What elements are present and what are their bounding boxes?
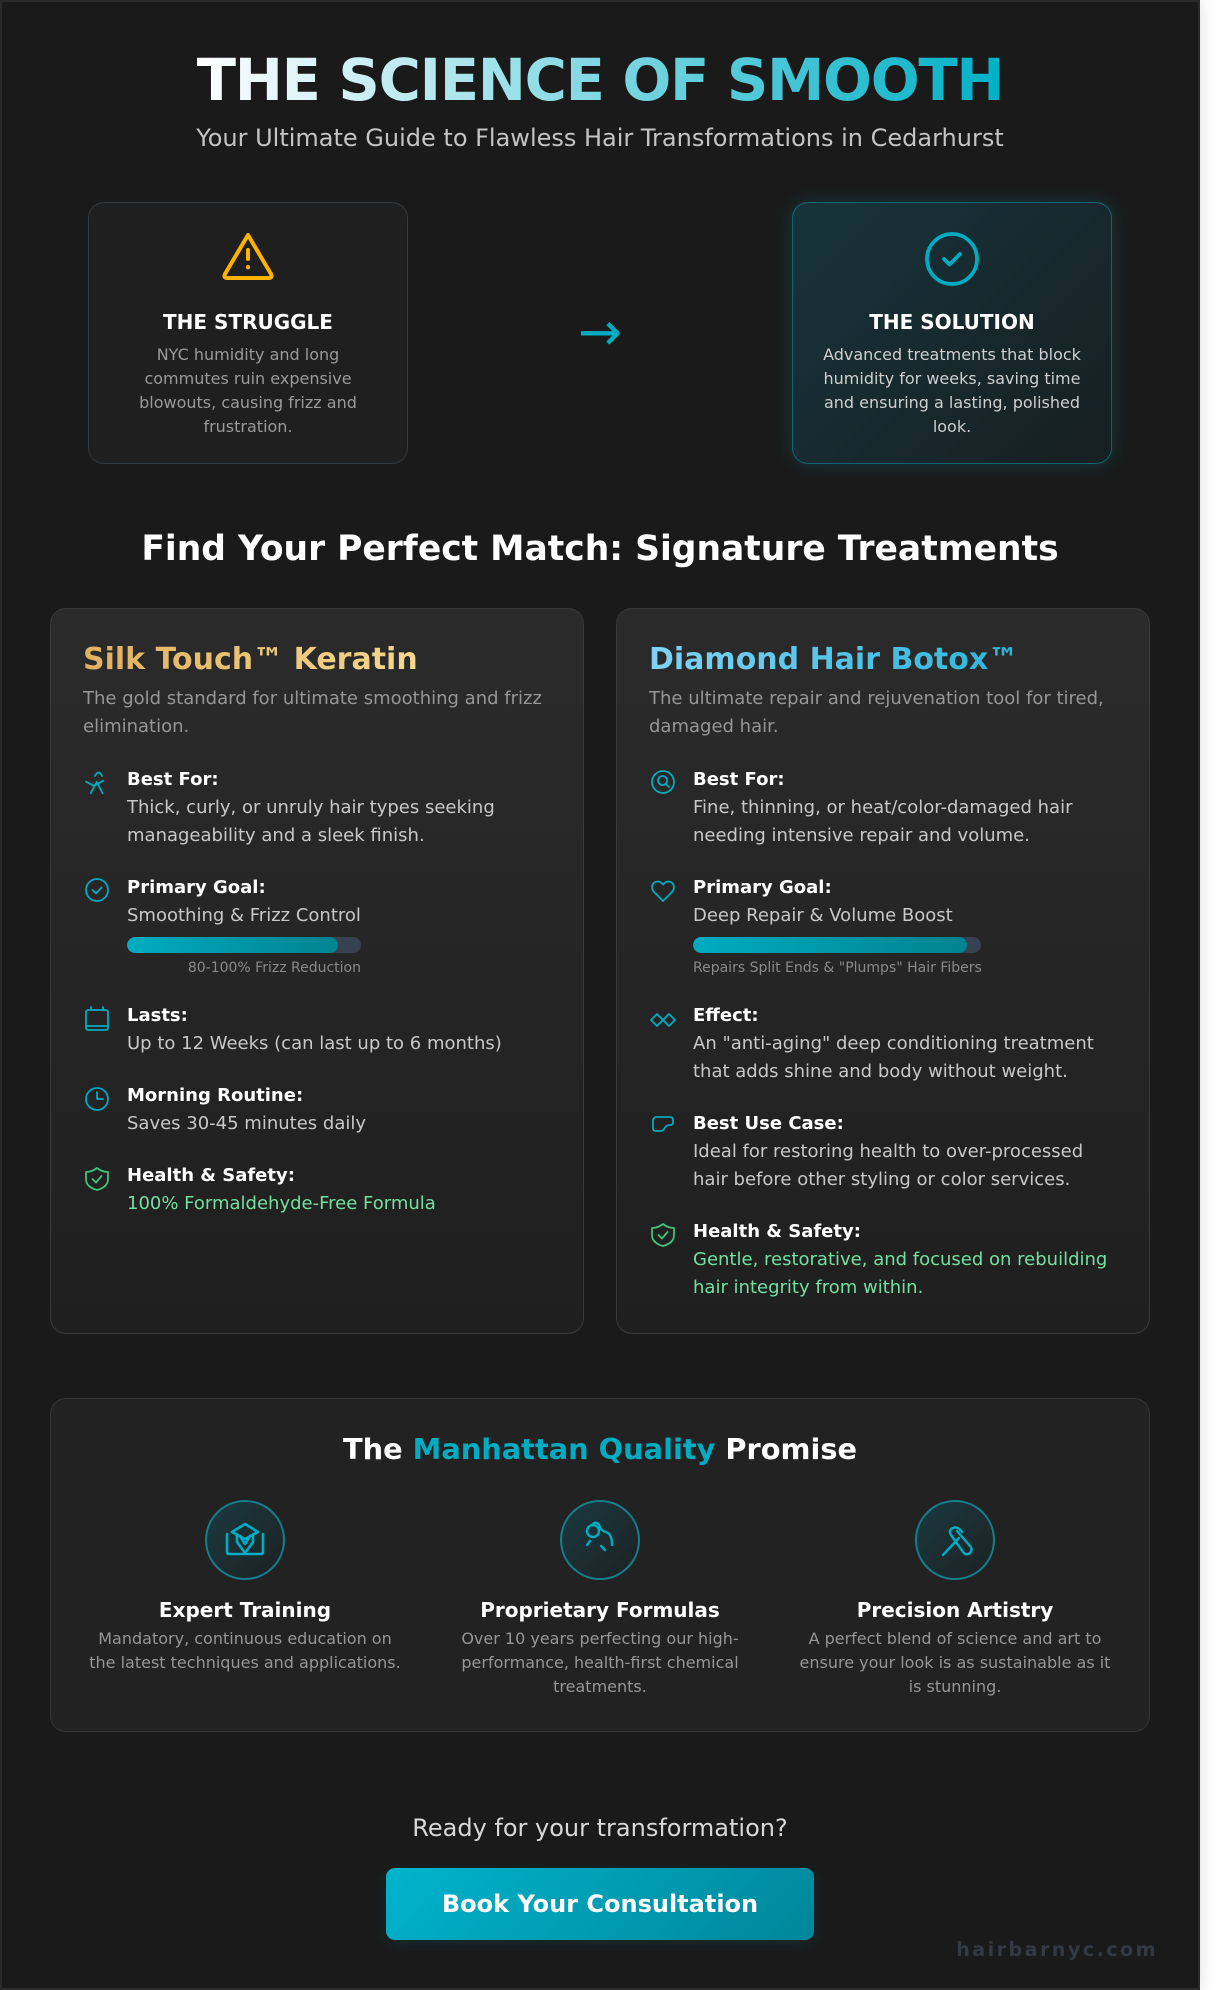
- card description: The ultimate repair and rejuvenation tool for tired,: [649, 688, 1104, 709]
- primary goal: [127, 877, 361, 926]
- best use case: [693, 1113, 1083, 1190]
- morning routine: [127, 1085, 366, 1134]
- panel: Silk Touch Keratin: [50, 608, 584, 1334]
- lasts: [127, 1005, 502, 1054]
- call to action button: [386, 1868, 814, 1940]
- best for: manageability and a sleek finish.: [127, 825, 425, 846]
- effect: [693, 1005, 1094, 1082]
- icon: formula: [560, 1500, 640, 1580]
- health and safety: Health & Safety:: [127, 1165, 295, 1186]
- health and safety: [693, 1221, 1107, 1298]
- subtitle: Your Ultimate Guide to Flawless Hair Transformations in Cedarhurst: [196, 124, 1004, 152]
- progress label: Repairs Split Ends & "Plumps" Hair Fibers: [693, 960, 982, 976]
- solution text: and ensuring a lasting, polished: [824, 393, 1080, 412]
- solution text: humidity for weeks, saving time: [824, 369, 1080, 388]
- struggle text: blowouts, causing frizz and: [139, 393, 357, 412]
- formulas text: [461, 1629, 739, 1696]
- call to action text: Ready for your transformation?: [412, 1814, 788, 1842]
- icon: heart: [651, 880, 675, 902]
- health and safety: 100% Formaldehyde-Free Formula: [127, 1193, 436, 1214]
- icon: goal check: [85, 878, 109, 902]
- morning routine: Saves 30-45 minutes daily: [127, 1113, 366, 1134]
- primary goal: Primary Goal:: [127, 877, 266, 898]
- title: THE SCIENCE OF SMOOTH: [197, 47, 1003, 114]
- formulas text: performance, health-first chemical: [461, 1653, 739, 1672]
- formulas text: treatments.: [553, 1677, 647, 1696]
- struggle text: NYC humidity and long: [157, 345, 339, 364]
- card description: elimination.: [83, 716, 189, 737]
- primary goal: [693, 877, 953, 926]
- struggle text: [139, 345, 357, 436]
- artistry text: is stunning.: [909, 1677, 1001, 1696]
- best use case: Ideal for restoring health to over-processed: [693, 1141, 1083, 1162]
- expert training: [89, 1598, 401, 1672]
- promise heading: The Manhattan Quality Promise: [343, 1432, 857, 1466]
- solution text: Advanced treatments that block: [823, 345, 1081, 364]
- card description: damaged hair.: [649, 716, 779, 737]
- progress label: 80-100% Frizz Reduction: [188, 960, 361, 976]
- health and safety: [127, 1165, 436, 1214]
- panel: Diamond Hair Botox: [616, 608, 1150, 1334]
- struggle text: commutes ruin expensive: [144, 369, 352, 388]
- training text: the latest techniques and applications.: [89, 1653, 401, 1672]
- precision artistry: [800, 1598, 1110, 1696]
- training text: Mandatory, continuous education on: [98, 1629, 392, 1648]
- artistry text: [800, 1629, 1110, 1696]
- effect: Effect:: [693, 1005, 759, 1026]
- icon: search circle: [651, 770, 675, 794]
- primary goal: Deep Repair & Volume Boost: [693, 905, 953, 926]
- icon: precision tool: [915, 1500, 995, 1580]
- panel: the struggle: [88, 202, 408, 464]
- card description: [82, 688, 542, 737]
- artistry title: Precision Artistry: [857, 1598, 1053, 1622]
- best for: Best For:: [127, 769, 219, 790]
- lasts: Lasts:: [127, 1005, 188, 1026]
- panel: the solution: [792, 202, 1112, 464]
- effect: An "anti-aging" deep conditioning treatment: [693, 1033, 1094, 1054]
- watermark: hairbarnyc.com: [956, 1938, 1158, 1961]
- training title: Expert Training: [159, 1598, 331, 1622]
- solution text: [823, 345, 1081, 436]
- struggle text: frustration.: [203, 417, 293, 436]
- icon: clock: [85, 1087, 109, 1111]
- artistry text: ensure your look is as sustainable as it: [800, 1653, 1110, 1672]
- panel: Manhattan Quality Promise: [50, 1398, 1150, 1732]
- card description: [648, 688, 1104, 737]
- card title: Diamond Hair Botox™: [649, 642, 1018, 677]
- progress bar: [693, 937, 981, 953]
- section heading: Find Your Perfect Match: Signature Treatments: [141, 529, 1059, 569]
- icon: graduation cap: [205, 1500, 285, 1580]
- proprietary formulas: [461, 1598, 739, 1696]
- arrow: →: [578, 302, 622, 363]
- best for: needing intensive repair and volume.: [693, 825, 1030, 846]
- training text: [89, 1629, 401, 1672]
- health and safety: Health & Safety:: [693, 1221, 861, 1242]
- best for: [693, 769, 1072, 846]
- icon: shield: [651, 1223, 675, 1247]
- primary goal: Primary Goal:: [693, 877, 832, 898]
- health and safety: Gentle, restorative, and focused on rebuilding: [693, 1249, 1107, 1270]
- icon: warning triangle: [222, 232, 274, 280]
- best for: Thick, curly, or unruly hair types seeking: [127, 797, 495, 818]
- card description: The gold standard for ultimate smoothing and frizz: [83, 688, 542, 709]
- formulas title: Proprietary Formulas: [480, 1598, 720, 1622]
- artistry text: A perfect blend of science and art to: [809, 1629, 1101, 1648]
- icon: shield: [85, 1167, 109, 1191]
- health and safety: hair integrity from within.: [693, 1277, 923, 1298]
- icon: calendar: [85, 1006, 109, 1031]
- call to action button: Book Your Consultation: [442, 1890, 758, 1918]
- icon: best for: [85, 772, 104, 794]
- lasts: Up to 12 Weeks (can last up to 6 months): [127, 1033, 502, 1054]
- struggle heading: THE STRUGGLE: [163, 310, 333, 334]
- solution heading: THE SOLUTION: [869, 310, 1035, 334]
- formulas text: Over 10 years perfecting our high-: [461, 1629, 739, 1648]
- icon: speech shape: [652, 1116, 674, 1132]
- best use case: Best Use Case:: [693, 1113, 844, 1134]
- icon: infinity: [650, 1013, 676, 1027]
- card title: Silk Touch™ Keratin: [83, 642, 418, 677]
- morning routine: Morning Routine:: [127, 1085, 303, 1106]
- primary goal: Smoothing & Frizz Control: [127, 905, 361, 926]
- effect: that adds shine and body without weight.: [693, 1061, 1068, 1082]
- progress bar: [127, 937, 361, 953]
- best use case: hair before other styling or color services.: [693, 1169, 1070, 1190]
- best for: Best For:: [693, 769, 785, 790]
- solution text: look.: [933, 417, 971, 436]
- best for: Fine, thinning, or heat/color-damaged hair: [693, 797, 1072, 818]
- icon: check circle: [925, 232, 979, 286]
- best for: [126, 769, 495, 846]
